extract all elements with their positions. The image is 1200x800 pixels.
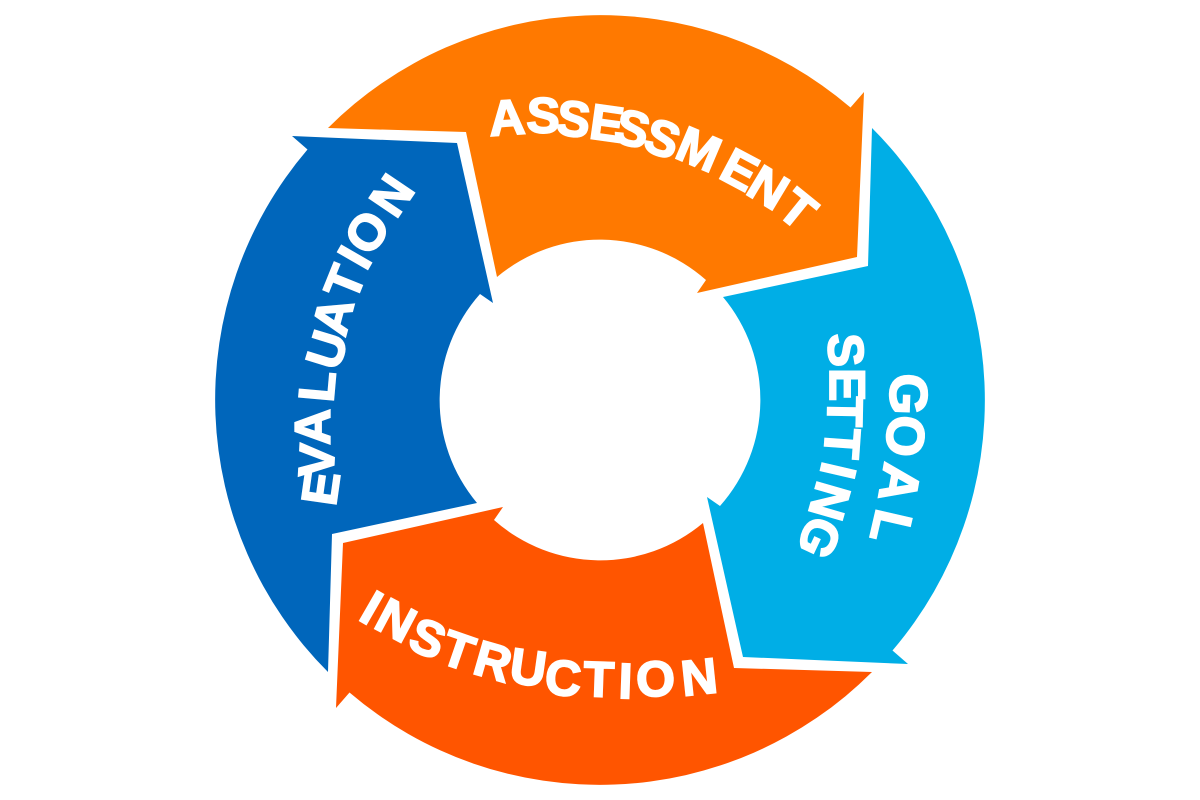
- label: instruction: INSTRUCTION: [352, 580, 720, 709]
- arrow segment: goal setting: [707, 128, 985, 664]
- arrow segment: instruction: [336, 507, 872, 785]
- label: evaluation: EVALUATION: [285, 165, 425, 509]
- arrow segment: assessment: [328, 15, 864, 293]
- label: goal setting: [786, 332, 938, 567]
- label: goal setting: SETTING: [786, 332, 875, 567]
- label: goal setting: GOAL: [858, 373, 938, 549]
- arrow segment: evaluation: [215, 136, 493, 672]
- label: assessment: ASSESSMENT: [487, 87, 827, 241]
